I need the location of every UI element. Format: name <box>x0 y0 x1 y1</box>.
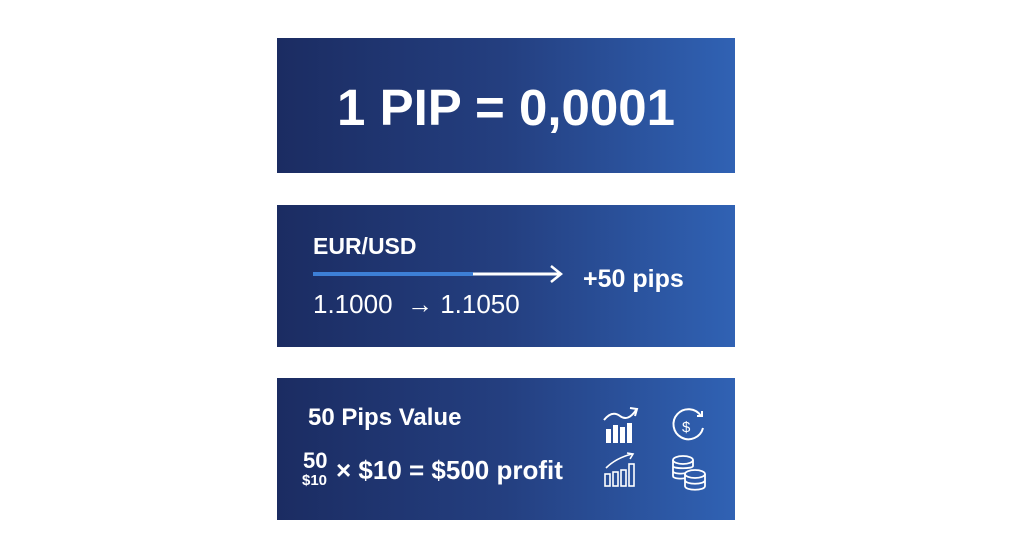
icon: dollar cycle <box>672 408 704 440</box>
formula: 50 <box>303 448 327 473</box>
panel: pips value <box>277 378 735 520</box>
formula <box>302 448 563 489</box>
panel: EUR/USD example <box>277 205 735 347</box>
formula: × $10 = $500 profit <box>336 455 563 485</box>
formula: $10 <box>302 472 327 489</box>
heading: 50 Pips Value: 50 Pips Value <box>308 404 461 431</box>
text: price change: 1.1000 → 1.1050 <box>313 289 520 319</box>
icon: bar chart <box>604 452 635 487</box>
heading: 1 PIP = 0,0001: 1 PIP = 0,0001 <box>337 79 675 136</box>
panel: pip definition <box>277 38 735 173</box>
icon: rising chart <box>603 407 638 443</box>
label: EUR/USD: EUR/USD <box>313 233 417 259</box>
icon: coins <box>672 455 706 491</box>
text: +50 pips: +50 pips <box>583 265 684 293</box>
arrow: price movement <box>313 265 563 283</box>
icon: dollar cycle: $ <box>682 419 691 436</box>
